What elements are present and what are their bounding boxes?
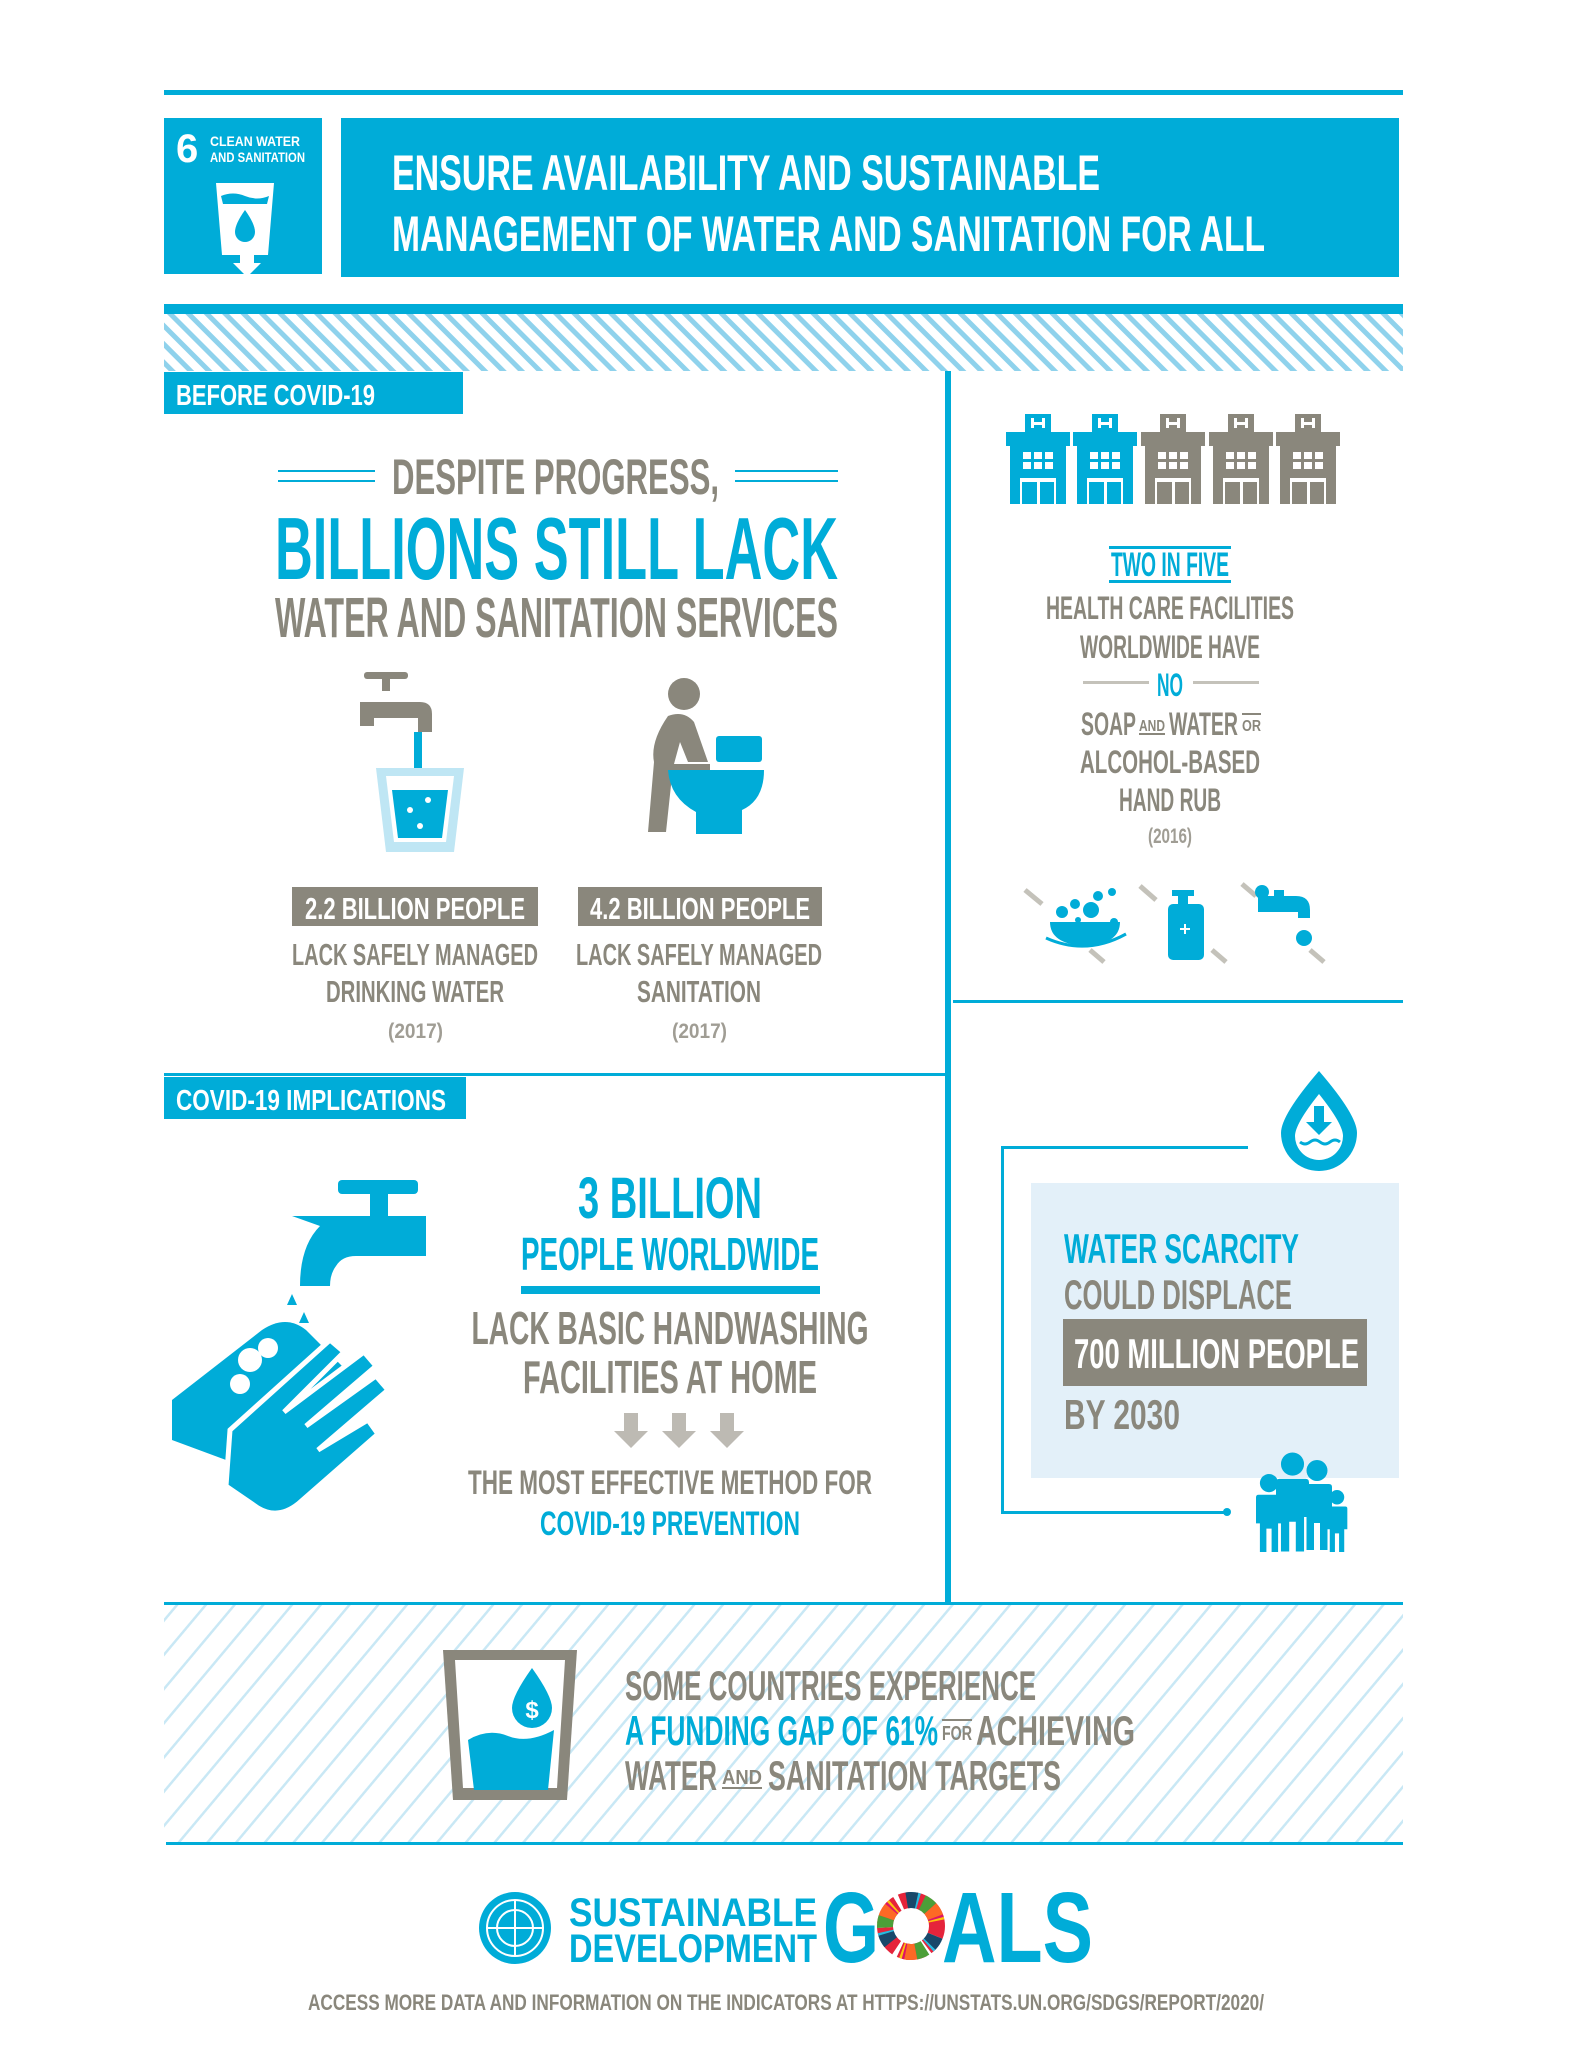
text: two in five health care facilities: TWO IN FIVE (1111, 546, 1229, 584)
bottom band: funding gap: A FUNDING GAP OF 61% (625, 1707, 938, 1754)
vertical divider (945, 371, 951, 1604)
icon: glass with dollar drop: $ (525, 1697, 539, 1724)
text: two in five health care facilities: HAND RUB (1119, 782, 1221, 818)
tab: covid-19 implications (164, 1077, 466, 1119)
tab: covid-19 implications: COVID-19 IMPLICATIONS (176, 1085, 446, 1117)
text: two in five health care facilities: WORLDWIDE HAVE (1080, 629, 1260, 665)
bottom band: funding gap: FOR (942, 1723, 972, 1745)
icon: family (1256, 1452, 1347, 1552)
bottom band: funding gap: ACHIEVING (976, 1707, 1135, 1754)
headline: billions still lack: DESPITE PROGRESS, (392, 449, 719, 505)
tab: before covid-19: BEFORE COVID-19 (176, 380, 375, 412)
SDG logo: ALS (942, 1872, 1093, 1984)
title banner: ENSURE AVAILABILITY AND SUSTAINABLE (392, 145, 1100, 201)
stat: 2.2 billion: DRINKING WATER (326, 974, 504, 1009)
icon: hospitals (2 of 5 highlighted) (1006, 414, 1340, 504)
stat: 4.2 billion: 4.2 BILLION PEOPLE (590, 891, 810, 926)
tab: before covid-19 (164, 372, 463, 414)
icon: glass with dollar drop (443, 1650, 577, 1800)
stat: 4.2 billion: (2017) (672, 1020, 727, 1043)
icons: soap, sanitizer, tap crossed out (1025, 884, 1324, 962)
icon: UN emblem (479, 1892, 551, 1964)
bottom band: funding gap: SANITATION TARGETS (768, 1752, 1061, 1799)
SDG logo (479, 1872, 1093, 1984)
headline: billions still lack: BILLIONS STILL LACK (275, 499, 838, 598)
text: two in five health care facilities (1046, 546, 1294, 848)
text: two in five health care facilities: AND (1139, 718, 1165, 735)
icon: tap and glass (360, 672, 464, 852)
goal 6 badge: 6 (176, 127, 198, 171)
bottom band: funding gap (164, 1602, 1403, 1845)
text: two in five health care facilities: (2016) (1148, 825, 1192, 848)
goal 6 badge: CLEAN WATER (210, 133, 300, 149)
icon: water drop with arrow (1281, 1071, 1357, 1171)
stat: 3 billion handwashing: LACK BASIC HANDWASHING (472, 1302, 868, 1354)
stat: 4.2 billion: LACK SAFELY MANAGED (576, 937, 822, 972)
callout: water scarcity (1031, 1183, 1399, 1478)
text: two in five health care facilities: OR (1242, 718, 1261, 735)
text: most effective method: THE MOST EFFECTIVE METHOD FOR (468, 1464, 872, 1502)
stat: 2.2 billion: (2017) (388, 1020, 443, 1043)
bottom band: funding gap: AND (722, 1767, 762, 1789)
icon: handwashing (172, 1180, 426, 1513)
headline: billions still lack (275, 449, 838, 650)
callout: water scarcity: 700 MILLION PEOPLE (1074, 1330, 1359, 1377)
text: most effective method: COVID-19 PREVENTION (540, 1505, 800, 1543)
stat: 3 billion handwashing: FACILITIES AT HOME (523, 1351, 817, 1403)
arrows down (614, 1413, 744, 1448)
bottom band: funding gap: WATER (625, 1752, 717, 1799)
SDG logo: SUSTAINABLE (569, 1891, 817, 1935)
bottom band: funding gap: SOME COUNTRIES EXPERIENCE (625, 1662, 1036, 1709)
stat: 3 billion handwashing (472, 1166, 868, 1403)
callout: water scarcity: BY 2030 (1064, 1391, 1180, 1438)
icon: SDG colour wheel (885, 1900, 937, 1952)
callout: water scarcity: WATER SCARCITY (1064, 1225, 1299, 1272)
goal 6 badge: AND SANITATION (210, 149, 305, 165)
stat: 2.2 billion (292, 887, 538, 1043)
stat: 4.2 billion (576, 887, 822, 1043)
stat: 4.2 billion: SANITATION (637, 974, 761, 1009)
text: most effective method (468, 1464, 872, 1543)
stat: 3 billion handwashing: PEOPLE WORLDWIDE (521, 1228, 819, 1280)
footer text: ACCESS MORE DATA AND INFORMATION ON THE INDICATORS AT HTTPS://UNSTATS.UN.ORG/SDGS/REPORT/2020/ (308, 1990, 1264, 2015)
stat: 2.2 billion: 2.2 BILLION PEOPLE (305, 891, 525, 926)
headline: billions still lack: WATER AND SANITATION SERVICES (275, 586, 838, 650)
text: two in five health care facilities: HEALTH CARE FACILITIES (1046, 590, 1294, 626)
SDG logo: G (823, 1872, 879, 1984)
SDG logo: DEVELOPMENT (569, 1927, 817, 1971)
goal 6 badge (164, 118, 322, 277)
title banner (341, 118, 1399, 277)
text: two in five health care facilities: ALCOHOL-BASED (1080, 744, 1260, 780)
stat: 2.2 billion: LACK SAFELY MANAGED (292, 937, 538, 972)
text: two in five health care facilities: SOAP (1081, 706, 1136, 742)
text: two in five health care facilities: WATER (1169, 706, 1238, 742)
stat: 3 billion handwashing: 3 BILLION (578, 1166, 762, 1231)
callout: water scarcity: COULD DISPLACE (1064, 1271, 1292, 1318)
top rule (164, 90, 1403, 95)
text: two in five health care facilities: NO (1157, 667, 1183, 703)
bracket connector (1001, 1146, 1248, 1516)
icon: person on toilet (648, 678, 764, 834)
